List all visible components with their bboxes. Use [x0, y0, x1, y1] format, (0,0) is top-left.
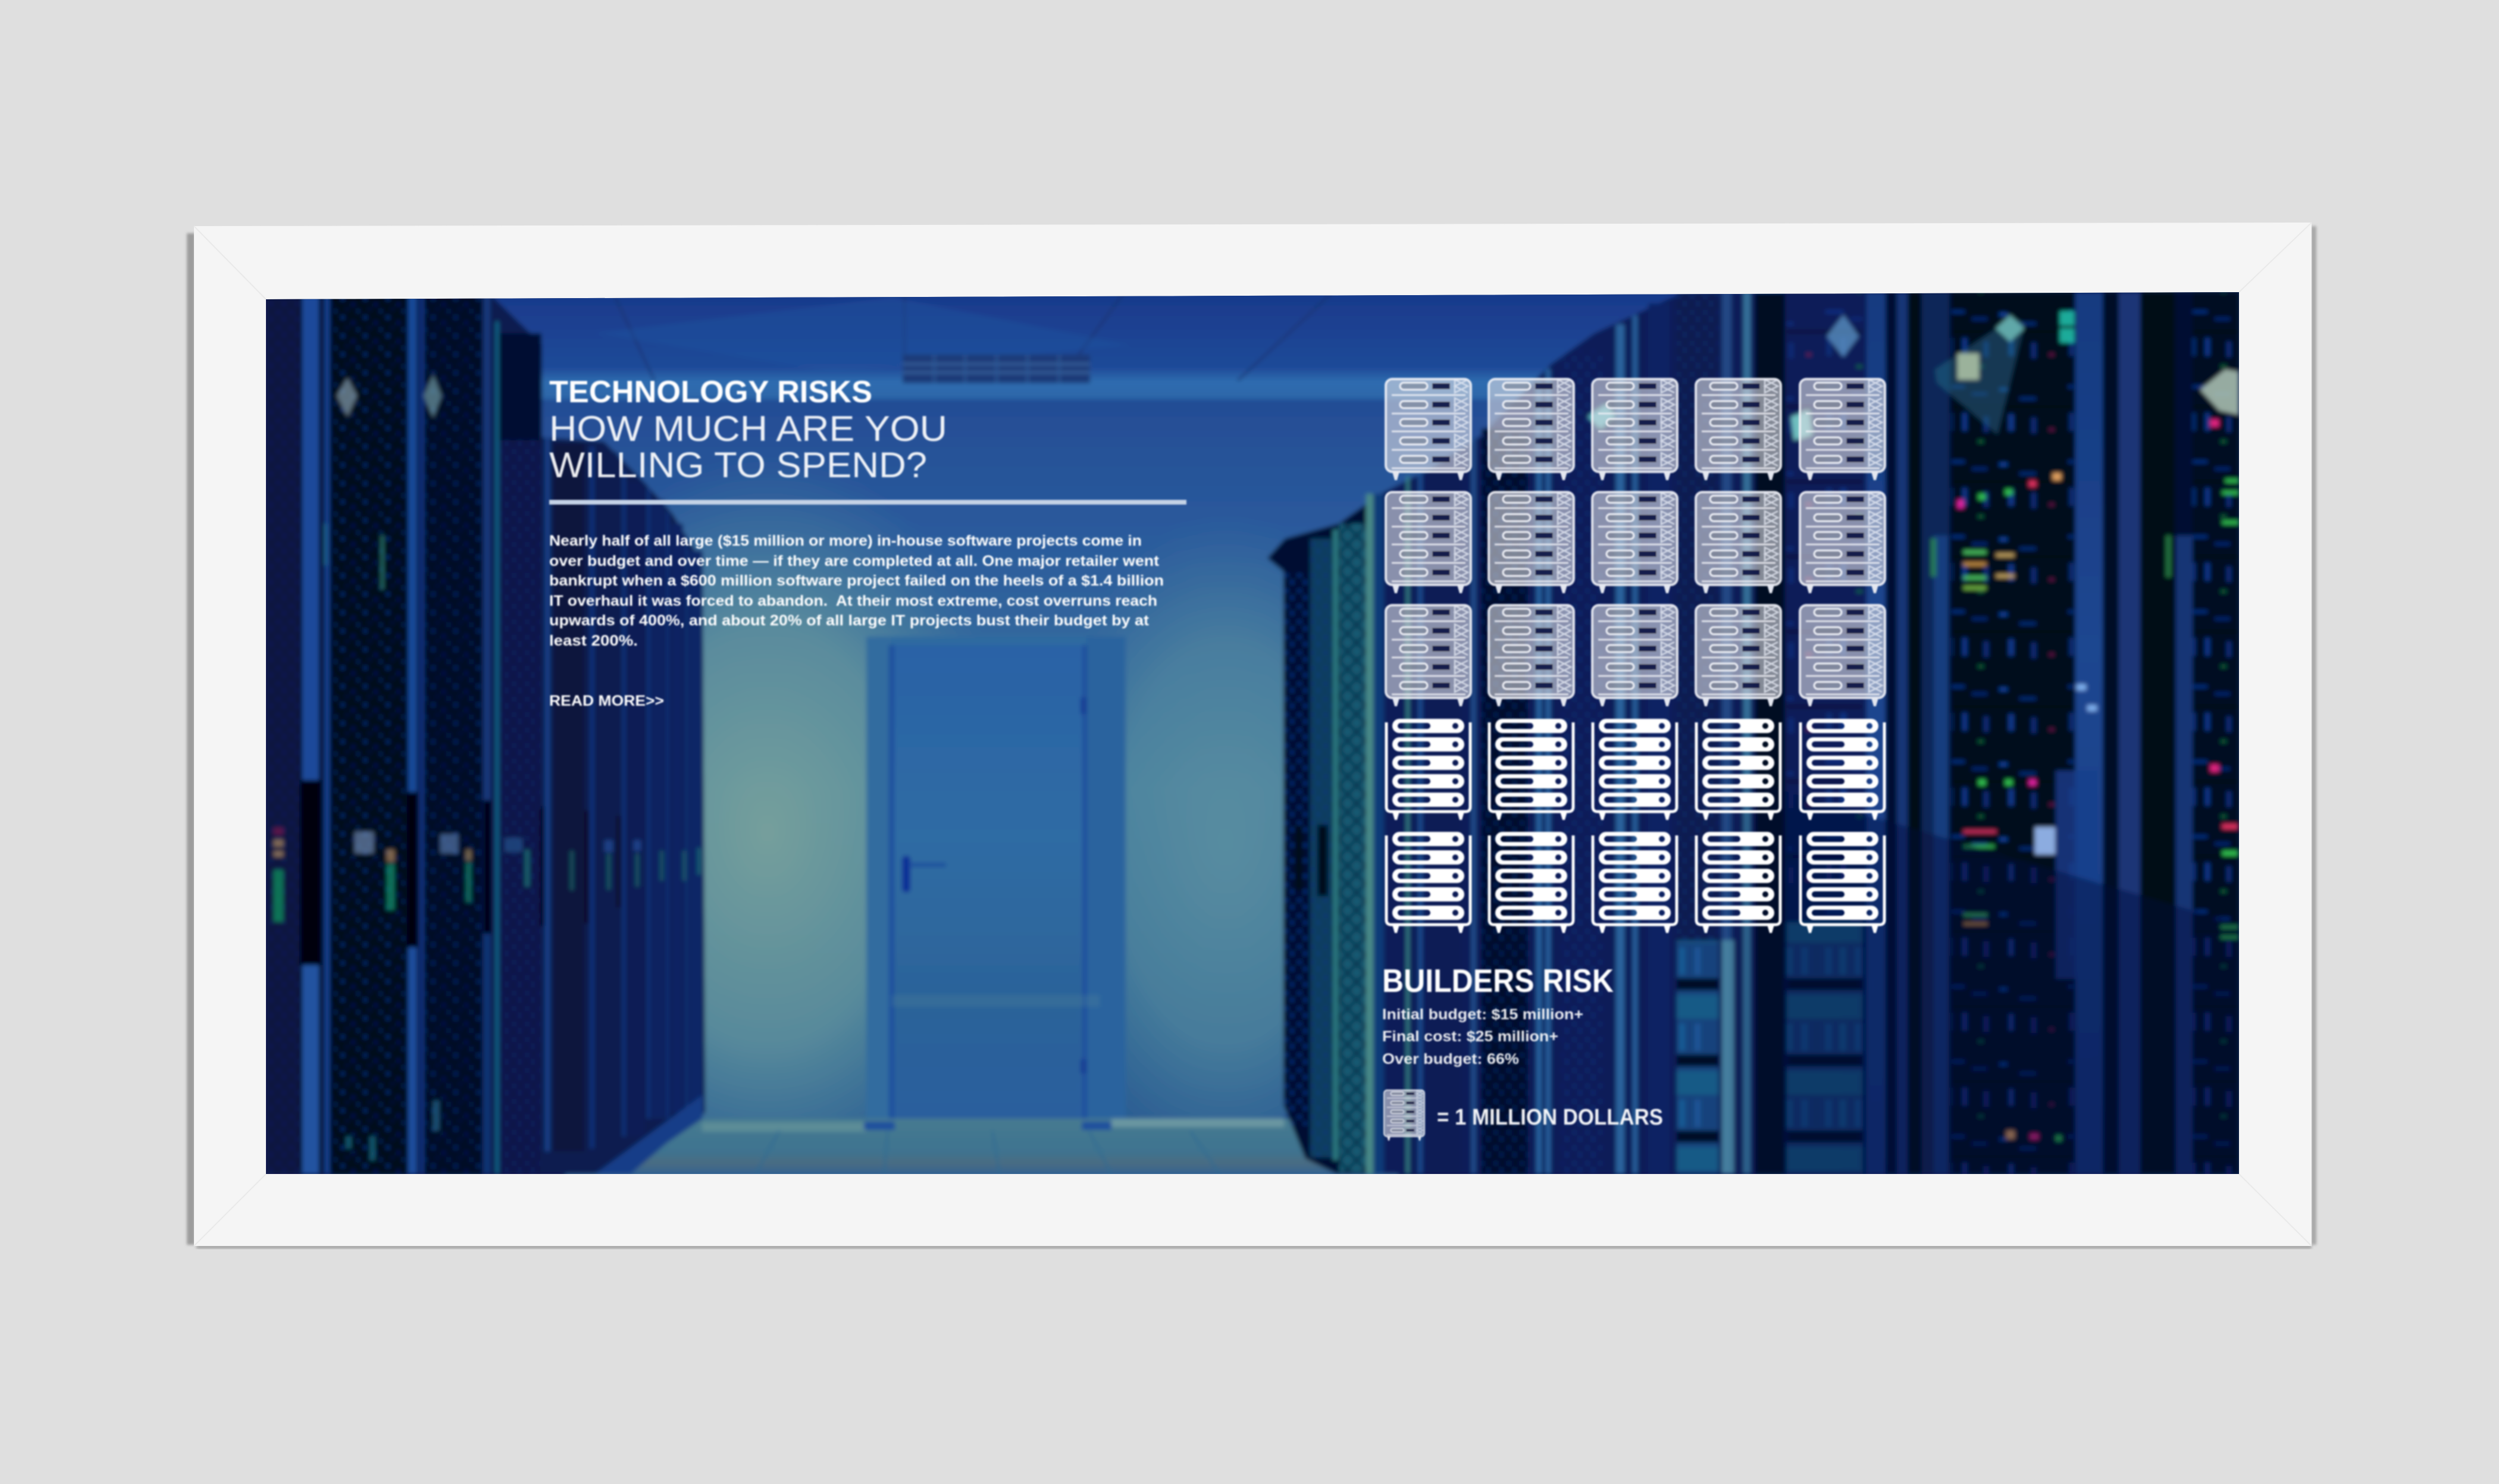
- builders risk figures: Initial budget: $15 million+: [1382, 1006, 1583, 1023]
- read more link: READ MORE>>: [549, 693, 664, 709]
- vertical uprights: [1407, 292, 2239, 1174]
- body paragraph: bankrupt when a $600 million software project failed on the heels of a $1.4 billion: [549, 572, 1164, 589]
- receding racks near door: [1283, 494, 1384, 1174]
- divider rule: [549, 500, 1186, 505]
- framed photograph: server room: [262, 286, 2243, 1214]
- door handle: [902, 856, 946, 893]
- heading: how much are you: HOW MUCH ARE YOU: [549, 409, 947, 449]
- icons row 5: overrun: [1386, 832, 1884, 933]
- room: ceiling: [476, 286, 1785, 399]
- status lights and glints: [1587, 311, 2239, 1141]
- legend label: = 1 MILLION DOLLARS: [1437, 1105, 1663, 1130]
- picture frame: [187, 223, 2316, 1249]
- body paragraph: least 200%.: [549, 633, 638, 649]
- builders risk figures: [1382, 1006, 1583, 1067]
- room: teal light glow: [656, 487, 1292, 1119]
- builders risk block: [1382, 962, 1663, 1141]
- legend icon: [1384, 1090, 1424, 1141]
- title block: [549, 375, 1186, 709]
- body paragraph: upwards of 400%, and about 20% of all large IT projects bust their budget by at: [549, 612, 1150, 629]
- builders risk figures: Over budget: 66%: [1382, 1051, 1519, 1067]
- glass reflection edge: [1726, 774, 2239, 1174]
- server icon grid: 25 icons = 25 million dollars: [1386, 379, 1885, 933]
- icons row 2: initial budget: [1386, 492, 1885, 593]
- icons row 4: overrun: [1386, 719, 1884, 820]
- body paragraph: Nearly half of all large ($15 million or more) in-house software projects come in: [549, 533, 1142, 549]
- icons row 3: initial budget: [1386, 605, 1885, 706]
- server racks: left aisle: [266, 292, 705, 1174]
- glints and status lights: [274, 375, 701, 1160]
- foreground rack fronts: [266, 292, 499, 1174]
- room: back wall: [538, 396, 1513, 1121]
- legend: [1384, 1090, 1663, 1141]
- image underlay: [262, 289, 2243, 1178]
- heading: technology risks: TECHNOLOGY RISKS: [549, 375, 872, 409]
- builders risk heading: BUILDERS RISK: [1382, 962, 1614, 999]
- floor and skirting: [565, 1119, 1398, 1178]
- builders risk figures: Final cost: $25 million+: [1382, 1028, 1558, 1045]
- body paragraph: [549, 533, 1164, 649]
- icons row 1: initial budget: [1386, 379, 1885, 480]
- server racks: right aisle: [1267, 292, 2239, 1174]
- receding rack uprights: [499, 333, 703, 1174]
- body paragraph: IT overhaul it was forced to abandon. At their most extreme, cost overruns reach: [549, 593, 1157, 609]
- door: [866, 637, 1126, 1125]
- body paragraph: over budget and over time — if they are completed at all. One major retailer went: [549, 553, 1160, 569]
- ceiling vent: [903, 355, 1090, 383]
- heading: willing to spend: WILLING TO SPEND?: [549, 445, 927, 485]
